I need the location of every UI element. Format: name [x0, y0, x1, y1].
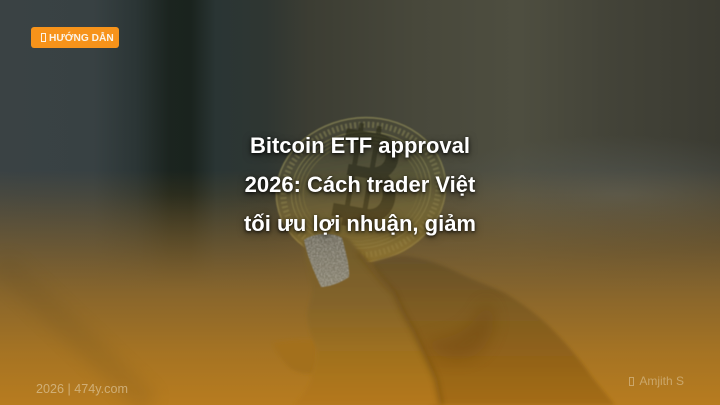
title: tối ưu lợi nhuận, giảm — [244, 211, 476, 236]
hand: thumb — [294, 235, 441, 405]
hand: thumb edge shadow — [358, 252, 441, 405]
title: 2026: Cách trader Việt — [245, 172, 475, 197]
badge: category label — [31, 27, 119, 48]
badge: category label: HƯỚNG DẪN — [49, 33, 114, 44]
title — [242, 133, 478, 240]
hand: index finger — [372, 256, 615, 405]
hand: small finger — [273, 340, 316, 374]
photo author credit: Amjith S — [639, 374, 684, 388]
source credit: 2026 | 474y.com — [36, 382, 128, 396]
diagonal background tone — [0, 262, 150, 405]
fingernail — [304, 234, 349, 287]
icon: bitcoin coin — [264, 103, 458, 277]
title: Bitcoin ETF approval — [250, 133, 470, 158]
hand: finger crease shadow — [425, 300, 493, 359]
